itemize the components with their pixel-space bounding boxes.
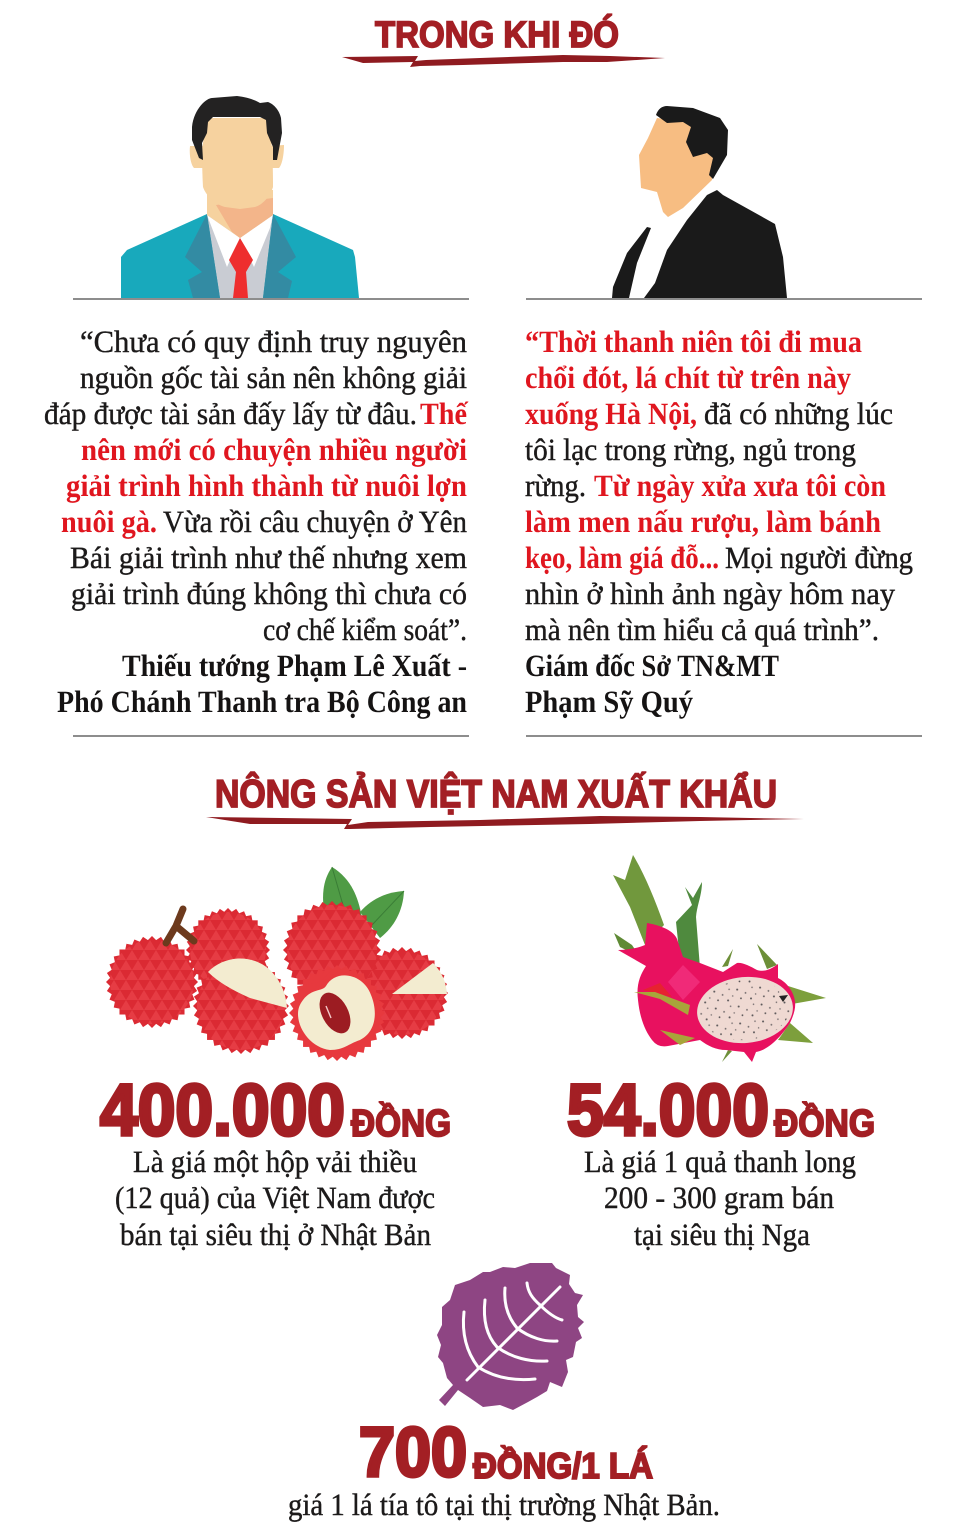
caption: dragon fruit price [584,1144,856,1252]
quote: Pham Sy Quy: mà nên tìm hiểu cả quá trình”. [525,612,879,647]
quote: Pham Sy Quy: đã có những lúc [704,396,893,431]
illustration: man in teal suit [121,96,359,298]
quote: Pham Sy Quy: Giám đốc Sở TN&MT [525,648,779,683]
quote: Pham Le Xuat: giải trình đúng không thì chưa có [71,576,467,611]
caption: lychee price: bán tại siêu thị ở Nhật Bản [120,1217,431,1252]
icon: perilla leaf [437,1263,584,1410]
quote: Pham Sy Quy: tôi lạc trong rừng, ngủ trong [525,432,856,467]
opened fruit with seed [289,965,385,1061]
caption: dragon fruit price: Là giá 1 quả thanh long [584,1144,856,1179]
caption: perilla leaf price: giá 1 lá tía tô tại thị trường Nhật Bản. [288,1487,720,1522]
heading: Nông sản Việt Nam xuất khẩu: NÔNG SẢN VIỆT NAM XUẤT KHẨU [215,772,777,816]
quote: Pham Le Xuat: Thế [420,396,469,431]
quote: Pham Le Xuat: Thiếu tướng Phạm Lê Xuất - [122,648,467,683]
skin highlights [634,965,700,1045]
divider: left bottom [73,735,469,737]
green bracts [613,855,826,1062]
stem [166,909,194,943]
quote: Pham Le Xuat: Vừa rồi câu chuyện ở Yên [163,504,467,539]
fruit flesh [694,973,796,1047]
quote: Pham Sy Quy: kẹo, làm giá đỗ... [525,540,719,575]
quote: Pham Le Xuat: cơ chế kiểm soát”. [263,612,467,647]
quote: Pham Le Xuat: Phó Chánh Thanh tra Bộ Công an [57,684,467,719]
heading: Nông sản Việt Nam xuất khẩu [206,772,804,829]
quote: Pham Le Xuat: đáp được tài sản đấy lấy từ đâu. [44,396,417,431]
leaves [323,867,404,938]
quote: Pham Le Xuat: giải trình hình thành từ nuôi lợn [66,468,467,503]
quote: Pham Le Xuat: Bái giải trình như thế nhưng xem [70,540,467,575]
quote: Pham Le Xuat [44,324,469,719]
quote: Pham Sy Quy: “Thời thanh niên tôi đi mua [525,324,862,359]
caption: lychee price: (12 quả) của Việt Nam được [115,1180,435,1215]
whole and cut fruit [106,901,448,1054]
price: 700 đồng / 1 lá: ĐỒNG/1 LÁ [473,1445,653,1486]
quote: Pham Sy Quy: rừng. [525,468,586,503]
quote: Pham Le Xuat: nên mới có chuyện nhiều người [81,432,467,467]
quote: Pham Sy Quy: chổi đót, lá chít từ trên này [525,360,851,395]
price: 54.000 đồng: ĐỒNG [774,1101,875,1145]
quote: Pham Sy Quy: xuống Hà Nội, [525,396,697,431]
divider: left top [73,298,469,300]
caption: dragon fruit price: tại siêu thị Nga [634,1217,810,1252]
magenta skin [618,923,795,1062]
quote: Pham Sy Quy [525,324,913,719]
price: 700 đồng / 1 lá [359,1413,653,1491]
quote: Pham Sy Quy: Mọi người đừng [725,540,913,575]
illustration: lychees [106,867,448,1061]
caption: dragon fruit price: 200 - 300 gram bán [604,1180,834,1215]
quote: Pham Sy Quy: nhìn ở hình ảnh ngày hôm nay [525,576,895,611]
illustration: man in profile, black suit [612,106,787,298]
price: 700 đồng / 1 lá: 700 [359,1413,467,1491]
divider: right bottom [526,735,922,737]
caption: lychee price: Là giá một hộp vải thiều [133,1144,417,1179]
divider: right top [526,298,922,300]
price: 54.000 đồng: 54.000 [567,1070,769,1151]
quote: Pham Le Xuat: nuôi gà. [61,504,157,539]
title: Trong khi đó [342,14,665,67]
quote: Pham Sy Quy: Từ ngày xửa xưa tôi còn [594,468,886,503]
quote: Pham Sy Quy: làm men nấu rượu, làm bánh [525,504,881,539]
illustration: dragon fruit [613,855,826,1062]
title: Trong khi đó: TRONG KHI ĐÓ [375,14,619,55]
price: 400.000 đồng: ĐỒNG [351,1101,451,1145]
quote: Pham Le Xuat: “Chưa có quy định truy nguyên [80,324,467,359]
quote: Pham Le Xuat: nguồn gốc tài sản nên không giải [80,360,467,395]
caption: lychee price [115,1144,435,1252]
quote: Pham Sy Quy: Phạm Sỹ Quý [525,684,693,719]
price: 400.000 đồng: 400.000 [100,1070,345,1151]
